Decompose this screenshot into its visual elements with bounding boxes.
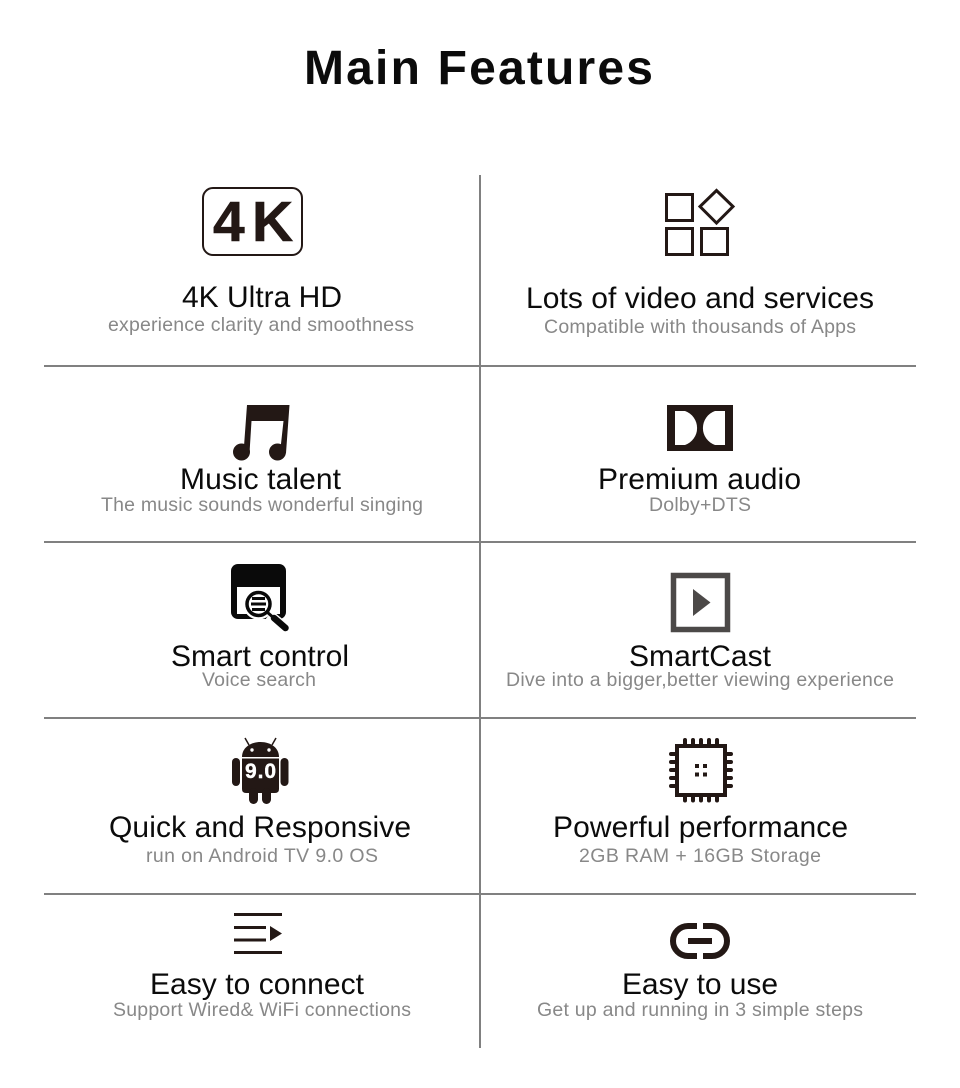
icon: voice search [231,564,287,630]
heading: Quick and Responsive: Quick and Responsive [109,811,411,844]
panel: Music talent [101,405,423,516]
icon: 4K badge: 4K [213,190,293,254]
icon: Dolby logo [667,405,733,451]
heading: Music talent: Music talent [180,463,342,496]
panel: Easy to use [537,926,863,1021]
panel: SmartCast [506,576,894,691]
panel: Smart control [171,564,349,691]
icon: processor chip [671,740,731,800]
text: connection description: Support Wired& WiFi connections [113,999,411,1021]
heading: Premium audio: Premium audio [598,463,801,496]
icon: playlist lines [234,913,282,954]
panel: Easy to connect [113,913,411,1021]
panel: Quick and Responsive [109,738,411,867]
icon: music note [233,405,290,460]
text: 4K description: experience clarity and smoothness [108,314,414,336]
panel: 4K Ultra HD [108,188,414,336]
text: music description: The music sounds wonderful singing [101,494,423,516]
text: memory description: 2GB RAM + 16GB Storage [579,845,821,867]
icon: apps grid [666,190,733,254]
icon: play frame [674,576,728,630]
heading: Powerful performance: Powerful performance [553,811,848,844]
text: cast description: Dive into a bigger,better viewing experience [506,669,894,691]
title: Main Features [304,42,653,95]
text: audio description: Dolby+DTS [649,494,751,516]
icon: link [673,926,727,956]
panel: Premium audio [598,405,801,516]
panel: Lots of video and services [526,190,874,338]
heading: Easy to connect: Easy to connect [150,968,365,1001]
heading: SmartCast: SmartCast [629,640,772,673]
text: steps description: Get up and running in 3 simple steps [537,999,863,1021]
heading: Easy to use: Easy to use [622,968,778,1001]
panel: Powerful performance [553,740,848,867]
text: apps description: Compatible with thousands of Apps [544,316,856,338]
text: OS description: run on Android TV 9.0 OS [146,845,378,867]
text: voice description: Voice search [202,669,316,691]
icon: Android 9.0 [232,738,288,804]
heading: Lots of video and services: Lots of video and services [526,282,874,315]
icon: Android 9.0: 9.0 [245,760,276,783]
heading: Smart control: Smart control [171,640,349,673]
heading: 4K Ultra HD: 4K Ultra HD [182,281,342,314]
